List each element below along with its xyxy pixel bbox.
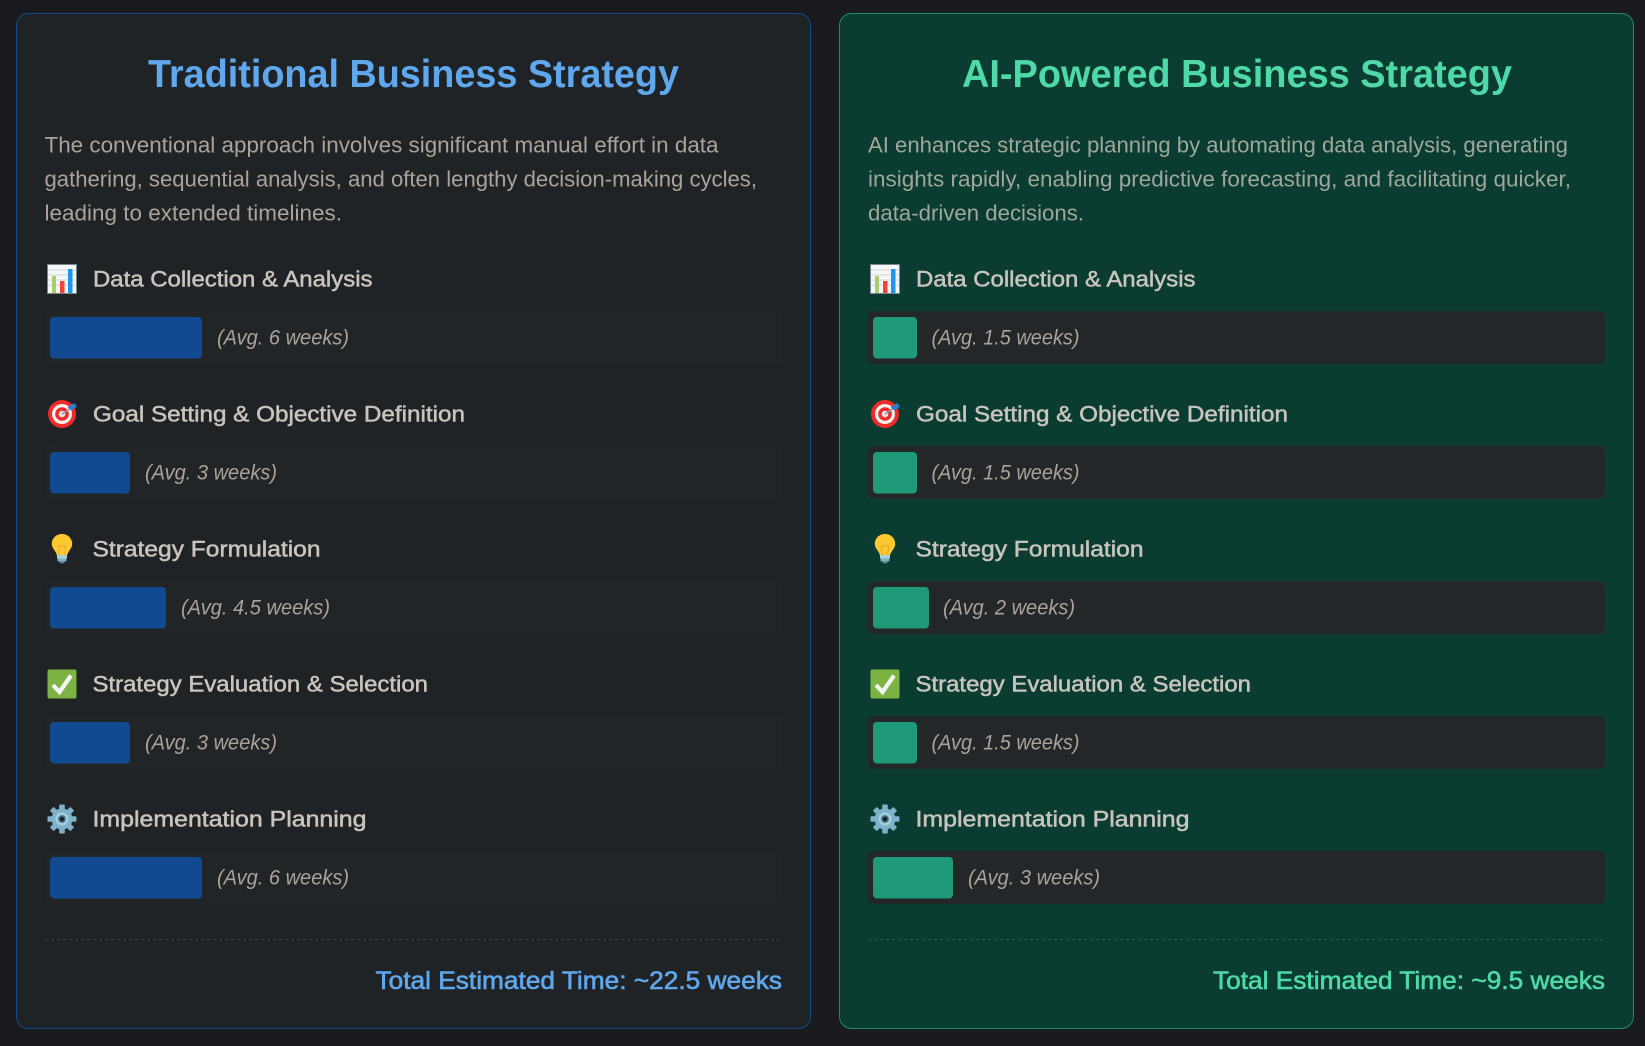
heading: traditional strategy: Traditional Business Strategy: [148, 53, 680, 96]
text block: AI description: insights rapidly, enabling predictive forecasting, and facilitating quicker,: [868, 166, 1571, 192]
step label: Strategy Formulation: [916, 536, 1144, 562]
step label: Data Collection & Analysis: [93, 266, 372, 292]
duration label: (Avg. 6 weeks): [217, 866, 349, 890]
step label: Goal Setting & Objective Definition: [916, 402, 1288, 426]
step: data collection: [45, 264, 782, 364]
icon: gear: [48, 804, 76, 834]
total: AI-powered: Total Estimated Time: ~9.5 weeks: [1213, 967, 1605, 995]
step: strategy formulation: [868, 534, 1605, 634]
step label: Implementation Planning: [916, 806, 1190, 832]
track: [45, 716, 782, 769]
icon: check mark: [48, 670, 76, 698]
step: data collection: [868, 264, 1605, 364]
step: goal setting: [45, 400, 782, 499]
track: [45, 581, 782, 634]
heading: AI-powered strategy: AI-Powered Business Strategy: [962, 53, 1513, 96]
duration label: (Avg. 4.5 weeks): [181, 596, 330, 620]
duration label: (Avg. 1.5 weeks): [932, 462, 1080, 484]
duration bar: 3 weeks: [873, 857, 953, 898]
track: [45, 851, 782, 904]
text block: AI description: AI enhances strategic planning by automating data analysis, generating: [868, 132, 1568, 158]
duration label: (Avg. 2 weeks): [943, 596, 1075, 620]
duration bar: 6 weeks: [50, 857, 202, 898]
step: strategy formulation: [45, 534, 782, 634]
track: [868, 581, 1605, 634]
text block: traditional description: leading to extended timelines.: [44, 200, 342, 226]
step: implementation planning: [45, 804, 782, 904]
step: strategy evaluation: [45, 670, 782, 769]
text block: AI description: data-driven decisions.: [868, 200, 1084, 226]
text block: traditional description: gathering, sequential analysis, and often lengthy decision-making cycles,: [44, 166, 757, 192]
panel: traditional strategy: [16, 14, 810, 1028]
text block: AI description: [868, 132, 1571, 226]
track: [45, 311, 782, 364]
panel: AI-powered strategy: [840, 14, 1634, 1028]
duration bar: 3 weeks: [50, 722, 130, 764]
step label: Strategy Formulation: [92, 536, 320, 562]
step: implementation planning: [868, 804, 1605, 904]
step label: Implementation Planning: [92, 806, 366, 832]
icon: light bulb: [875, 534, 895, 563]
duration bar: 3 weeks: [50, 452, 130, 494]
duration bar: 1.5 weeks: [873, 722, 917, 764]
text block: traditional description: The conventional approach involves significant manual effort in data: [44, 132, 719, 158]
duration label: (Avg. 1.5 weeks): [932, 732, 1080, 754]
duration label: (Avg. 6 weeks): [217, 326, 349, 350]
duration label: (Avg. 1.5 weeks): [932, 326, 1080, 350]
icon: target: [871, 400, 900, 428]
step label: Goal Setting & Objective Definition: [93, 402, 465, 426]
duration bar: 1.5 weeks: [873, 452, 917, 494]
icon: check mark: [870, 670, 900, 698]
track: [868, 311, 1605, 364]
duration label: (Avg. 3 weeks): [968, 866, 1100, 890]
total: traditional: Total Estimated Time: ~22.5 weeks: [376, 967, 782, 995]
step: strategy evaluation: [868, 670, 1605, 769]
duration bar: 1.5 weeks: [873, 317, 917, 358]
duration label: (Avg. 3 weeks): [145, 732, 277, 754]
icon: light bulb: [52, 534, 72, 563]
track: [868, 446, 1605, 499]
icon: bar chart: [870, 264, 900, 294]
icon: gear: [870, 804, 900, 834]
track: [45, 446, 782, 499]
step label: Strategy Evaluation & Selection: [916, 672, 1251, 696]
duration bar: 6 weeks: [50, 317, 202, 358]
duration bar: 2 weeks: [873, 587, 929, 628]
icon: bar chart: [48, 264, 76, 294]
icon: target: [48, 400, 77, 428]
step label: Strategy Evaluation & Selection: [92, 672, 428, 696]
duration label: (Avg. 3 weeks): [145, 462, 277, 484]
step label: Data Collection & Analysis: [916, 266, 1196, 292]
text block: traditional description: [44, 132, 757, 226]
track: [868, 716, 1605, 769]
step: goal setting: [868, 400, 1605, 499]
track: [868, 851, 1605, 904]
duration bar: 4.5 weeks: [50, 587, 166, 628]
